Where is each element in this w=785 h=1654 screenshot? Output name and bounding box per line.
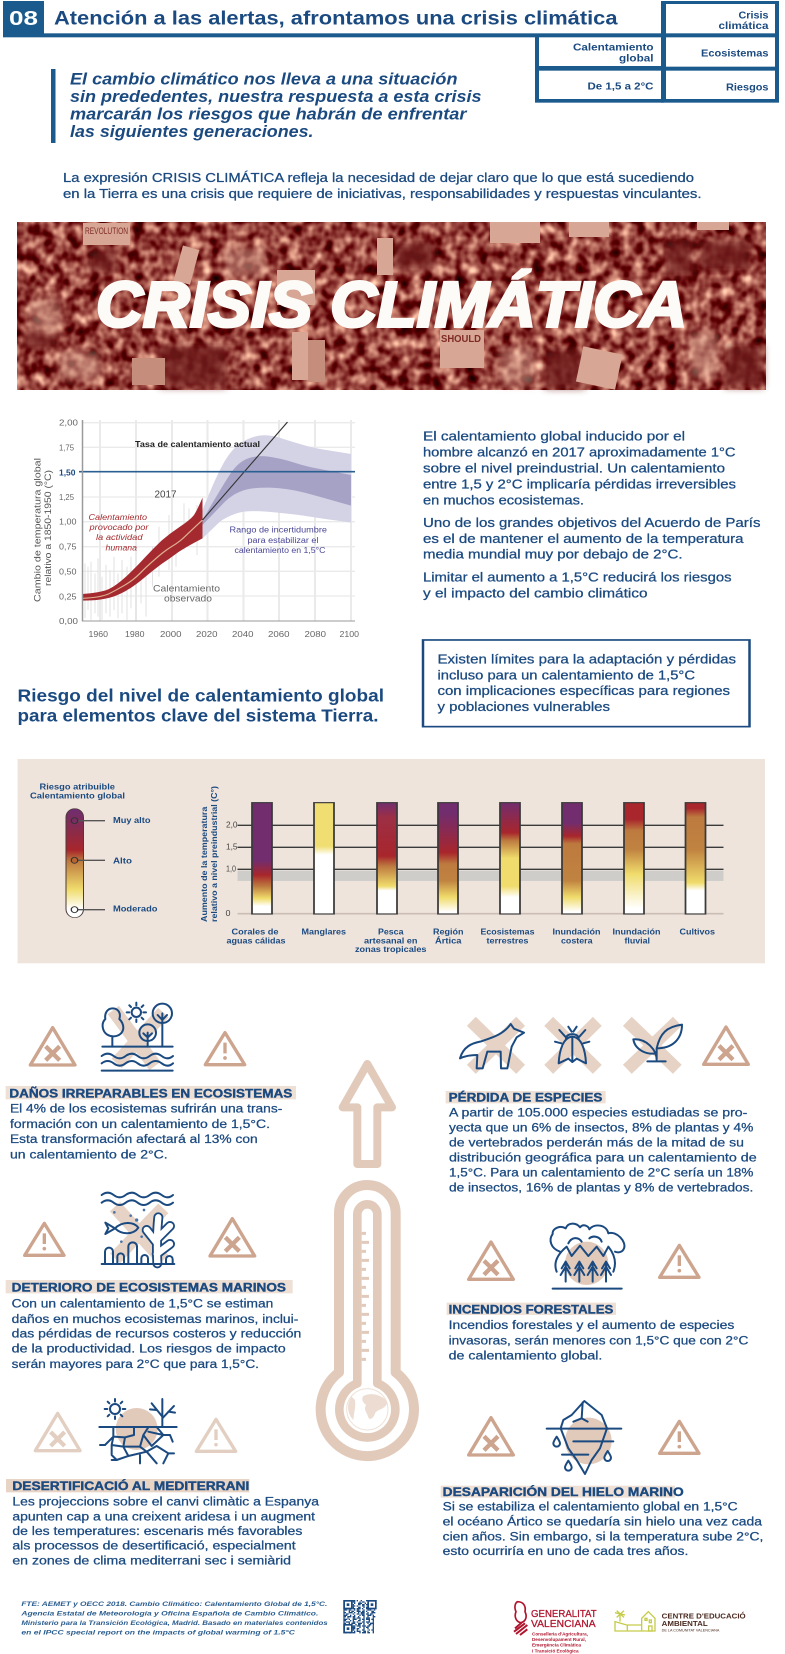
- icon: warning triangle with cross: [704, 1027, 748, 1064]
- banner title: CRISIS CLIMÁTICA: [96, 268, 687, 340]
- body text: de les temperatures: escenaris més favorables: [12, 1524, 302, 1538]
- legend: risk scale: Riesgo atribuible: [40, 782, 115, 792]
- body text: El 4% de los ecosistemas sufrirán una trans-: [10, 1101, 282, 1115]
- legend: risk scale: Moderado: [113, 904, 158, 914]
- icon: insect: [549, 1021, 597, 1069]
- heading: DESERTIFICACIÓ AL MEDITERRANI: [12, 1478, 249, 1493]
- axis labels: 1,00: [59, 518, 77, 527]
- heading: PÉRDIDA DE ESPECIES: [449, 1090, 602, 1105]
- legend: risk scale: Calentamiento global: [30, 791, 125, 801]
- source note: FTE: AEMET y OECC 2018. Cambio Climático: Calentamiento Global de 1,5°C.: [21, 1600, 327, 1608]
- body text: distribución geográfica para un calentamiento de: [449, 1150, 757, 1164]
- icon: warning triangle with exclamation: [196, 1419, 236, 1451]
- axis labels: 2080: [304, 630, 326, 639]
- body text: als processos de desertificació, especialment: [12, 1539, 296, 1553]
- body text: A partir de 105.000 especies estudiadas se pro-: [449, 1106, 747, 1120]
- body text: serán mayores para 2°C que para 1,5°C.: [12, 1357, 259, 1371]
- heading: DETERIORO DE ECOSISTEMAS MARINOS: [12, 1280, 286, 1294]
- logo: Centre d'Educació Ambiental: CENTRE D'EDUCACIÓ: [662, 1611, 746, 1620]
- line chart: warming scenarios: humana: [106, 543, 137, 553]
- line chart: warming scenarios: Calentamiento: [153, 583, 220, 594]
- intro quote: marcarán los riesgos que habrán de enfrentar: [70, 105, 468, 124]
- banner: crowd photo with title: [17, 222, 766, 390]
- chart: risk bars: fluvial: [624, 936, 650, 946]
- axis labels: 1,25: [59, 493, 74, 502]
- legend: risk scale: Alto: [113, 856, 132, 866]
- QR code: [343, 1601, 377, 1633]
- chart: risk bars: artesanal en: [364, 936, 418, 946]
- line chart: warming scenarios: Rango de incertidumbre: [230, 526, 327, 535]
- topic table: [535, 1, 779, 103]
- body text: formación con un calentamiento de 1,5°C.: [10, 1117, 270, 1131]
- chart: risk bars: terrestres: [486, 936, 529, 946]
- line chart: warming scenarios: para estabilizar el: [248, 536, 318, 545]
- heading: risk by warming level: Riesgo del nivel de calentamiento global: [18, 686, 384, 705]
- banner: crowd photo with title: SHOULD: [441, 334, 481, 345]
- icon: burning forest: [551, 1224, 624, 1289]
- chart: risk bars: Inundación: [552, 927, 601, 937]
- observed warming band: [82, 498, 202, 601]
- chart: risk bars: zonas tropicales: [355, 945, 426, 954]
- logo: Centre d'Educació Ambiental: [615, 1611, 746, 1632]
- intro paragraph: [63, 170, 701, 201]
- axis labels: 0,00: [59, 617, 78, 626]
- icon: plant: [627, 1021, 682, 1069]
- axis labels: 2000: [160, 630, 182, 639]
- body text: cien años. Sin embargo, si la temperatura sube 2°C,: [443, 1530, 763, 1544]
- line chart: warming scenarios: provocado por: [89, 523, 149, 532]
- heading: INCENDIOS FORESTALES: [449, 1303, 613, 1317]
- legend: risk scale: Muy alto: [113, 816, 151, 825]
- icon: warning triangle with exclamation: [660, 1245, 699, 1277]
- axis labels: 2040: [232, 630, 254, 639]
- chart: risk bars: Pesca: [378, 927, 404, 937]
- chart: risk bars: Ecosistemas: [480, 927, 534, 937]
- logo: Generalitat Valenciana: i Transició Ecològica: [532, 1649, 579, 1654]
- topic table: De 1,5 a 2°C: [588, 80, 653, 92]
- callout box: limits to adaptation: y poblaciones vulnerables: [437, 700, 610, 714]
- icon: wolf: [460, 1021, 524, 1069]
- chart: risk bars: Ártica: [435, 935, 462, 946]
- body text: de insectos, 16% de plantas y 8% de vertebrados.: [449, 1180, 753, 1194]
- topic table: Crisis: [738, 9, 769, 21]
- line chart: warming scenarios: relativo a 1850-1950 (°C): [43, 469, 53, 586]
- axis labels: 1,75: [59, 443, 74, 453]
- text block: forest fires: invasoras, serán menores con 1,5°C que con 2°C: [449, 1333, 749, 1347]
- heading: DESAPARICIÓN DEL HIELO MARINO: [443, 1484, 684, 1499]
- body text: [12, 1297, 301, 1371]
- section: forest fires: [447, 1224, 699, 1317]
- heading: risk by warming level: [18, 686, 384, 726]
- topic table: global: [619, 52, 654, 64]
- line chart: warming scenarios: Tasa de calentamiento actual: [135, 440, 260, 449]
- header bar: [3, 1, 664, 37]
- source note: Ministerio para la Transición Ecológica, Madrid. Basado en materiales contenidos: [21, 1620, 328, 1627]
- topic table: Calentamiento: [573, 41, 654, 53]
- logo: Generalitat Valenciana: [514, 1602, 597, 1654]
- intro quote: sin prededentes, nuestra respuesta a esta crisis: [70, 87, 482, 106]
- chart: risk bars: 0: [226, 910, 231, 918]
- line chart: warming scenarios: Calentamiento: [88, 513, 147, 522]
- icon: warning triangle with exclamation: [660, 1421, 699, 1453]
- text block: forest fires: [449, 1318, 749, 1362]
- thermometer with up arrow: [321, 1064, 414, 1456]
- body text: un calentamiento de 2°C.: [10, 1148, 168, 1162]
- line chart: warming scenarios: calentamiento en 1,5°C: [234, 546, 326, 555]
- icon: iceberg: [547, 1401, 621, 1474]
- body text: Con un calentamiento de 1,5°C se estiman: [12, 1297, 273, 1311]
- axis labels: [59, 419, 359, 639]
- chart: risk bars: Aumento de la temperatura: [199, 805, 209, 922]
- logo: Generalitat Valenciana: VALENCIANA: [531, 1619, 596, 1630]
- logo: Centre d'Educació Ambiental: AMBIENTAL: [662, 1619, 708, 1628]
- chart: risk bars: 1,5: [226, 843, 238, 852]
- axis labels: 2100: [340, 630, 359, 639]
- header bar: 08: [9, 8, 38, 30]
- heading: risk by warming level: para elementos clave del sistema Tierra.: [18, 706, 378, 726]
- body text: das pérdidas de recursos costeros y reducción: [12, 1326, 301, 1340]
- icon: warning triangle with cross: [469, 1418, 513, 1455]
- text block: global warming facts: en muchos ecosistemas.: [423, 493, 584, 507]
- icon: warning triangle with exclamation: [205, 1033, 245, 1065]
- intro quote: [51, 69, 482, 143]
- body text: esto ocurriría en uno de cada tres años.: [443, 1544, 688, 1558]
- logo: Generalitat Valenciana: Emergència Climàtica: [532, 1643, 581, 1648]
- text block: global warming facts: y el impacto del cambio climático: [423, 587, 648, 601]
- axis labels: 1960: [88, 630, 108, 639]
- section: damage to ecosystems: [6, 1003, 296, 1162]
- topic table: Riesgos: [726, 81, 768, 93]
- panel: risk matrix: [18, 759, 765, 963]
- chart: risk bars: Manglares: [302, 927, 346, 937]
- axis labels: 0,75: [59, 542, 77, 552]
- chart: risk bars: [199, 785, 723, 954]
- section: species loss: [446, 1021, 757, 1194]
- icon: fish and coral: [102, 1193, 174, 1264]
- chart: risk bars: costera: [561, 936, 593, 946]
- axis labels: 2060: [268, 630, 290, 639]
- logo: Generalitat Valenciana: GENERALITAT: [531, 1609, 597, 1620]
- axis labels: 2,00: [59, 419, 78, 428]
- body text: de vertebrados perderán más de la mitad de su: [449, 1135, 744, 1149]
- axis labels: 0,50: [59, 567, 77, 577]
- heading: DAÑOS IRREPARABLES EN ECOSISTEMAS: [9, 1085, 292, 1100]
- source note: en el IPCC special report on the impacts of global warming of 1.5°C: [21, 1629, 296, 1637]
- icon: warning triangle with cross: [469, 1242, 513, 1279]
- intro quote: El cambio climático nos lleva a una situación: [70, 69, 458, 88]
- logo: Generalitat Valenciana: Conselleria d'Agricultura,: [532, 1632, 588, 1637]
- axis labels: 1,50: [59, 468, 76, 478]
- chart: risk bars: 2,0: [226, 821, 238, 830]
- axis labels: 2020: [196, 630, 218, 639]
- chart: risk bars: Corales de: [231, 927, 278, 937]
- body text: 1,5°C. Para un calentamiento de 2°C sería un 18%: [449, 1166, 754, 1180]
- body text: apunten cap a una creixent aridesa i un augment: [12, 1509, 316, 1523]
- line chart: warming scenarios: observado: [164, 593, 212, 604]
- body text: [449, 1106, 757, 1194]
- logo: Centre d'Educació Ambiental: DE LA COMUNITAT VALENCIANA: [662, 1628, 720, 1632]
- topic table: climática: [718, 20, 769, 31]
- body text: [10, 1101, 282, 1162]
- icon: warning triangle with cross: [210, 1219, 255, 1256]
- chart: risk bars: Inundación: [612, 927, 661, 937]
- axis labels: 1980: [125, 630, 145, 639]
- source note: Agencia Estatal de Meteorología y Oficina Española de Cambio Climático.: [20, 1610, 318, 1617]
- body text: el océano Ártico se quedaría sin hielo una vez cada: [443, 1514, 762, 1529]
- text block: global warming facts: media mundial muy por debajo de 2°C.: [423, 548, 682, 562]
- section: desertification: [6, 1399, 319, 1567]
- icon: warning triangle with cross: [35, 1413, 80, 1451]
- axis labels: 0,25: [59, 592, 77, 602]
- body text: de la productividad. Los riesgos de impacto: [12, 1341, 286, 1355]
- body text: en zones de clima mediterrani sec i semiàrid: [12, 1553, 291, 1567]
- text block: global warming facts: [423, 430, 760, 601]
- line chart: warming scenarios: la actividad: [96, 533, 143, 542]
- body text: yecta que un 6% de insectos, 8% de plantas y 4%: [449, 1121, 754, 1135]
- icon: warning triangle with exclamation: [25, 1223, 64, 1255]
- legend: risk scale: [30, 782, 158, 918]
- logo: Generalitat Valenciana: Desenvolupament Rural,: [532, 1637, 586, 1642]
- source note: [20, 1600, 328, 1637]
- body text: daños en muchos ecosistemas marinos, inclui-: [12, 1312, 298, 1326]
- icon: trees and water: [102, 1003, 173, 1071]
- chart: risk bars: Región: [433, 927, 464, 937]
- line chart: warming scenarios: 2017: [154, 488, 177, 500]
- chart: risk bars: aguas cálidas: [226, 936, 285, 946]
- text block: forest fires: de calentamiento global.: [449, 1348, 602, 1362]
- intro quote: las siguientes generaciones.: [70, 122, 313, 141]
- icon: warning triangle with cross: [30, 1028, 75, 1065]
- icon: cracked soil, sun and dead tree: [99, 1399, 177, 1463]
- title: Atención a las alertas, afrontamos una crisis climática: [54, 8, 618, 29]
- body text: [443, 1500, 763, 1558]
- line chart: warming scenarios: [32, 419, 359, 639]
- body text: Si se estabiliza el calentamiento global en 1,5°C: [443, 1500, 738, 1514]
- banner: crowd photo with title: REVOLUTION: [85, 226, 128, 236]
- chart: risk bars: Cultivos: [680, 927, 715, 937]
- text block: global warming facts: El calentamiento global inducido por el: [423, 430, 685, 444]
- body text: [12, 1495, 319, 1567]
- callout box: limits to adaptation: incluso para un calentamiento de 1,5°C: [437, 668, 695, 682]
- section: sea ice loss: [441, 1401, 763, 1558]
- section: marine ecosystems: [6, 1193, 301, 1371]
- callout box: limits to adaptation: [423, 640, 750, 727]
- chart: risk bars: 1,0: [226, 865, 236, 874]
- line chart: warming scenarios: Cambio de temperatura global: [32, 458, 43, 602]
- uncertainty bands: [202, 435, 351, 538]
- body text: Les projeccions sobre el canvi climàtic a Espanya: [12, 1495, 319, 1509]
- chart: risk bars: relativo a nivel preindustrial (C°): [209, 785, 219, 922]
- text block: forest fires: Incendios forestales y el aumento de especies: [449, 1318, 734, 1332]
- body text: Esta transformación afectará al 13% con: [10, 1132, 258, 1146]
